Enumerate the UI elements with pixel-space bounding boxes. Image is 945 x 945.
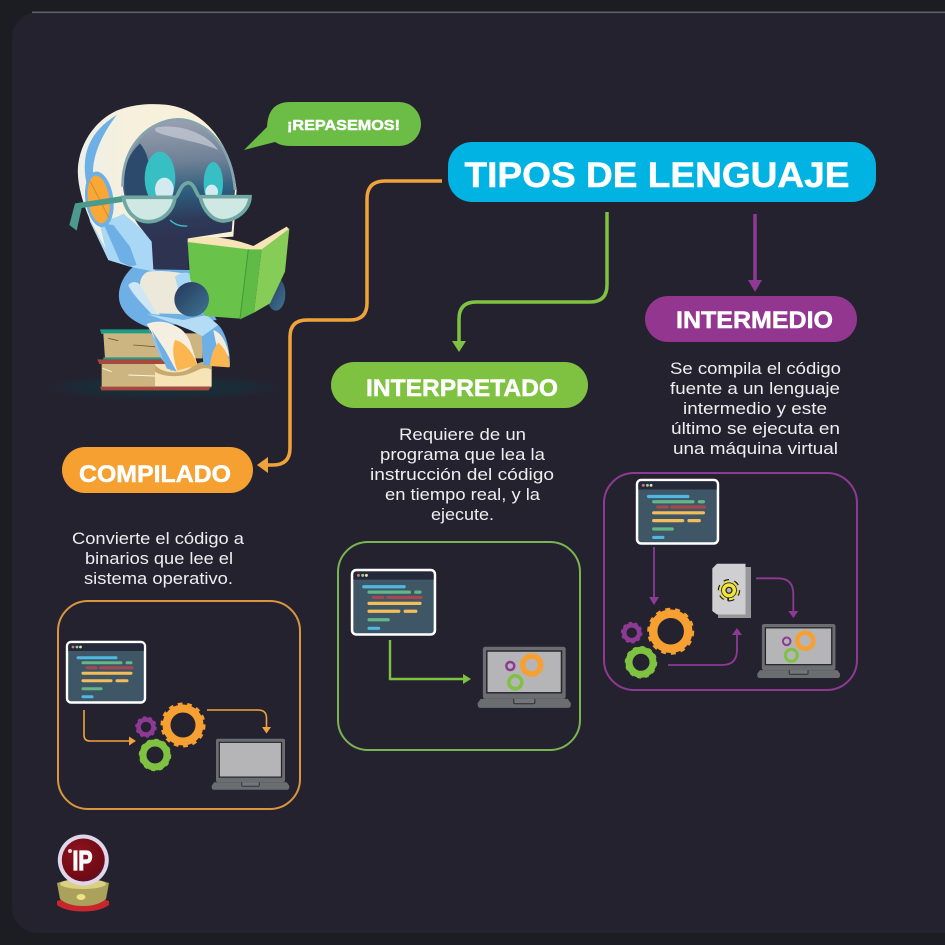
text: intermedio description: intermedio y este xyxy=(683,399,827,418)
icon: laptop with gears xyxy=(757,624,840,678)
icon: laptop xyxy=(212,739,289,790)
visor xyxy=(123,119,235,270)
panel: interpretado diagram xyxy=(338,542,580,750)
icon: code window xyxy=(352,570,435,634)
text: interpretado description: ejecute. xyxy=(431,505,494,524)
icon: intermediate file xyxy=(712,564,751,618)
arrow: code to gears xyxy=(649,547,659,605)
text: interpretado description: en tiempo real, y la xyxy=(385,485,541,504)
text: intermedio description: una máquina virtual xyxy=(673,439,838,458)
panel: intermedio diagram xyxy=(604,473,857,690)
speech bubble: ¡REPASEMOS! xyxy=(244,102,421,150)
text: compilado description: sistema operativo. xyxy=(84,569,233,588)
text: compilado description: binarios que lee el xyxy=(85,549,233,568)
text: interpretado description: Requiere de un xyxy=(399,425,526,444)
arrow: gears to file xyxy=(668,628,742,665)
text: intermedio description: último se ejecuta en xyxy=(671,419,840,438)
text: interpretado description: programa que lea la xyxy=(380,445,546,464)
logo: crystal ball xyxy=(57,834,109,912)
eyes xyxy=(145,152,223,205)
visor highlight xyxy=(155,126,218,150)
heading: interpretado: INTERPRETADO xyxy=(366,375,558,402)
text: interpretado description: instrucción del código xyxy=(370,465,554,484)
arrow: title to interpretado xyxy=(452,212,607,352)
glasses xyxy=(69,183,250,231)
logo: crystal ball: IP xyxy=(72,845,92,876)
visor dark side xyxy=(124,143,153,220)
ground shadow xyxy=(43,375,283,400)
open book xyxy=(188,227,289,319)
text: intermedio description: fuente a un lenguaje xyxy=(670,379,840,398)
text: intermedio description: Se compila el código xyxy=(670,359,841,378)
ear piece xyxy=(82,170,117,229)
icon: gears xyxy=(622,609,693,677)
arrow: file to laptop xyxy=(756,578,798,618)
arrow: gears to laptop xyxy=(207,710,271,734)
arrow: code to laptop xyxy=(390,640,471,684)
speech bubble: ¡REPASEMOS!: ¡REPASEMOS! xyxy=(287,117,400,134)
arrow: title to compilado xyxy=(257,181,442,473)
heading: compilado: COMPILADO xyxy=(79,461,231,488)
title xyxy=(448,142,876,202)
illustration: robot reading a book on a stack of books xyxy=(43,104,289,400)
icon: gears xyxy=(136,704,204,770)
heading: intermedio: INTERMEDIO xyxy=(676,307,833,334)
smile xyxy=(170,220,187,226)
text: compilado description xyxy=(72,529,245,588)
helmet xyxy=(78,104,237,272)
arrow: title to intermedio xyxy=(748,214,762,292)
heading: compilado xyxy=(62,447,253,493)
stack of books xyxy=(97,329,212,390)
text: intermedio description xyxy=(670,359,841,458)
panel: compilado diagram xyxy=(58,601,300,809)
heading: intermedio xyxy=(645,296,857,342)
icon: code window xyxy=(67,642,145,702)
icon: laptop with gears xyxy=(478,647,571,708)
heading: interpretado xyxy=(331,362,588,408)
near hand xyxy=(174,282,209,317)
visor rim xyxy=(123,119,235,190)
icon: code window xyxy=(637,480,718,543)
arrow: code to gears xyxy=(84,710,136,746)
text: interpretado description xyxy=(370,425,554,524)
legs and feet xyxy=(147,322,230,372)
body xyxy=(119,267,218,337)
title: TIPOS DE LENGUAJE xyxy=(464,156,850,195)
text: compilado description: Convierte el código a xyxy=(72,529,245,548)
far hand xyxy=(267,277,285,311)
